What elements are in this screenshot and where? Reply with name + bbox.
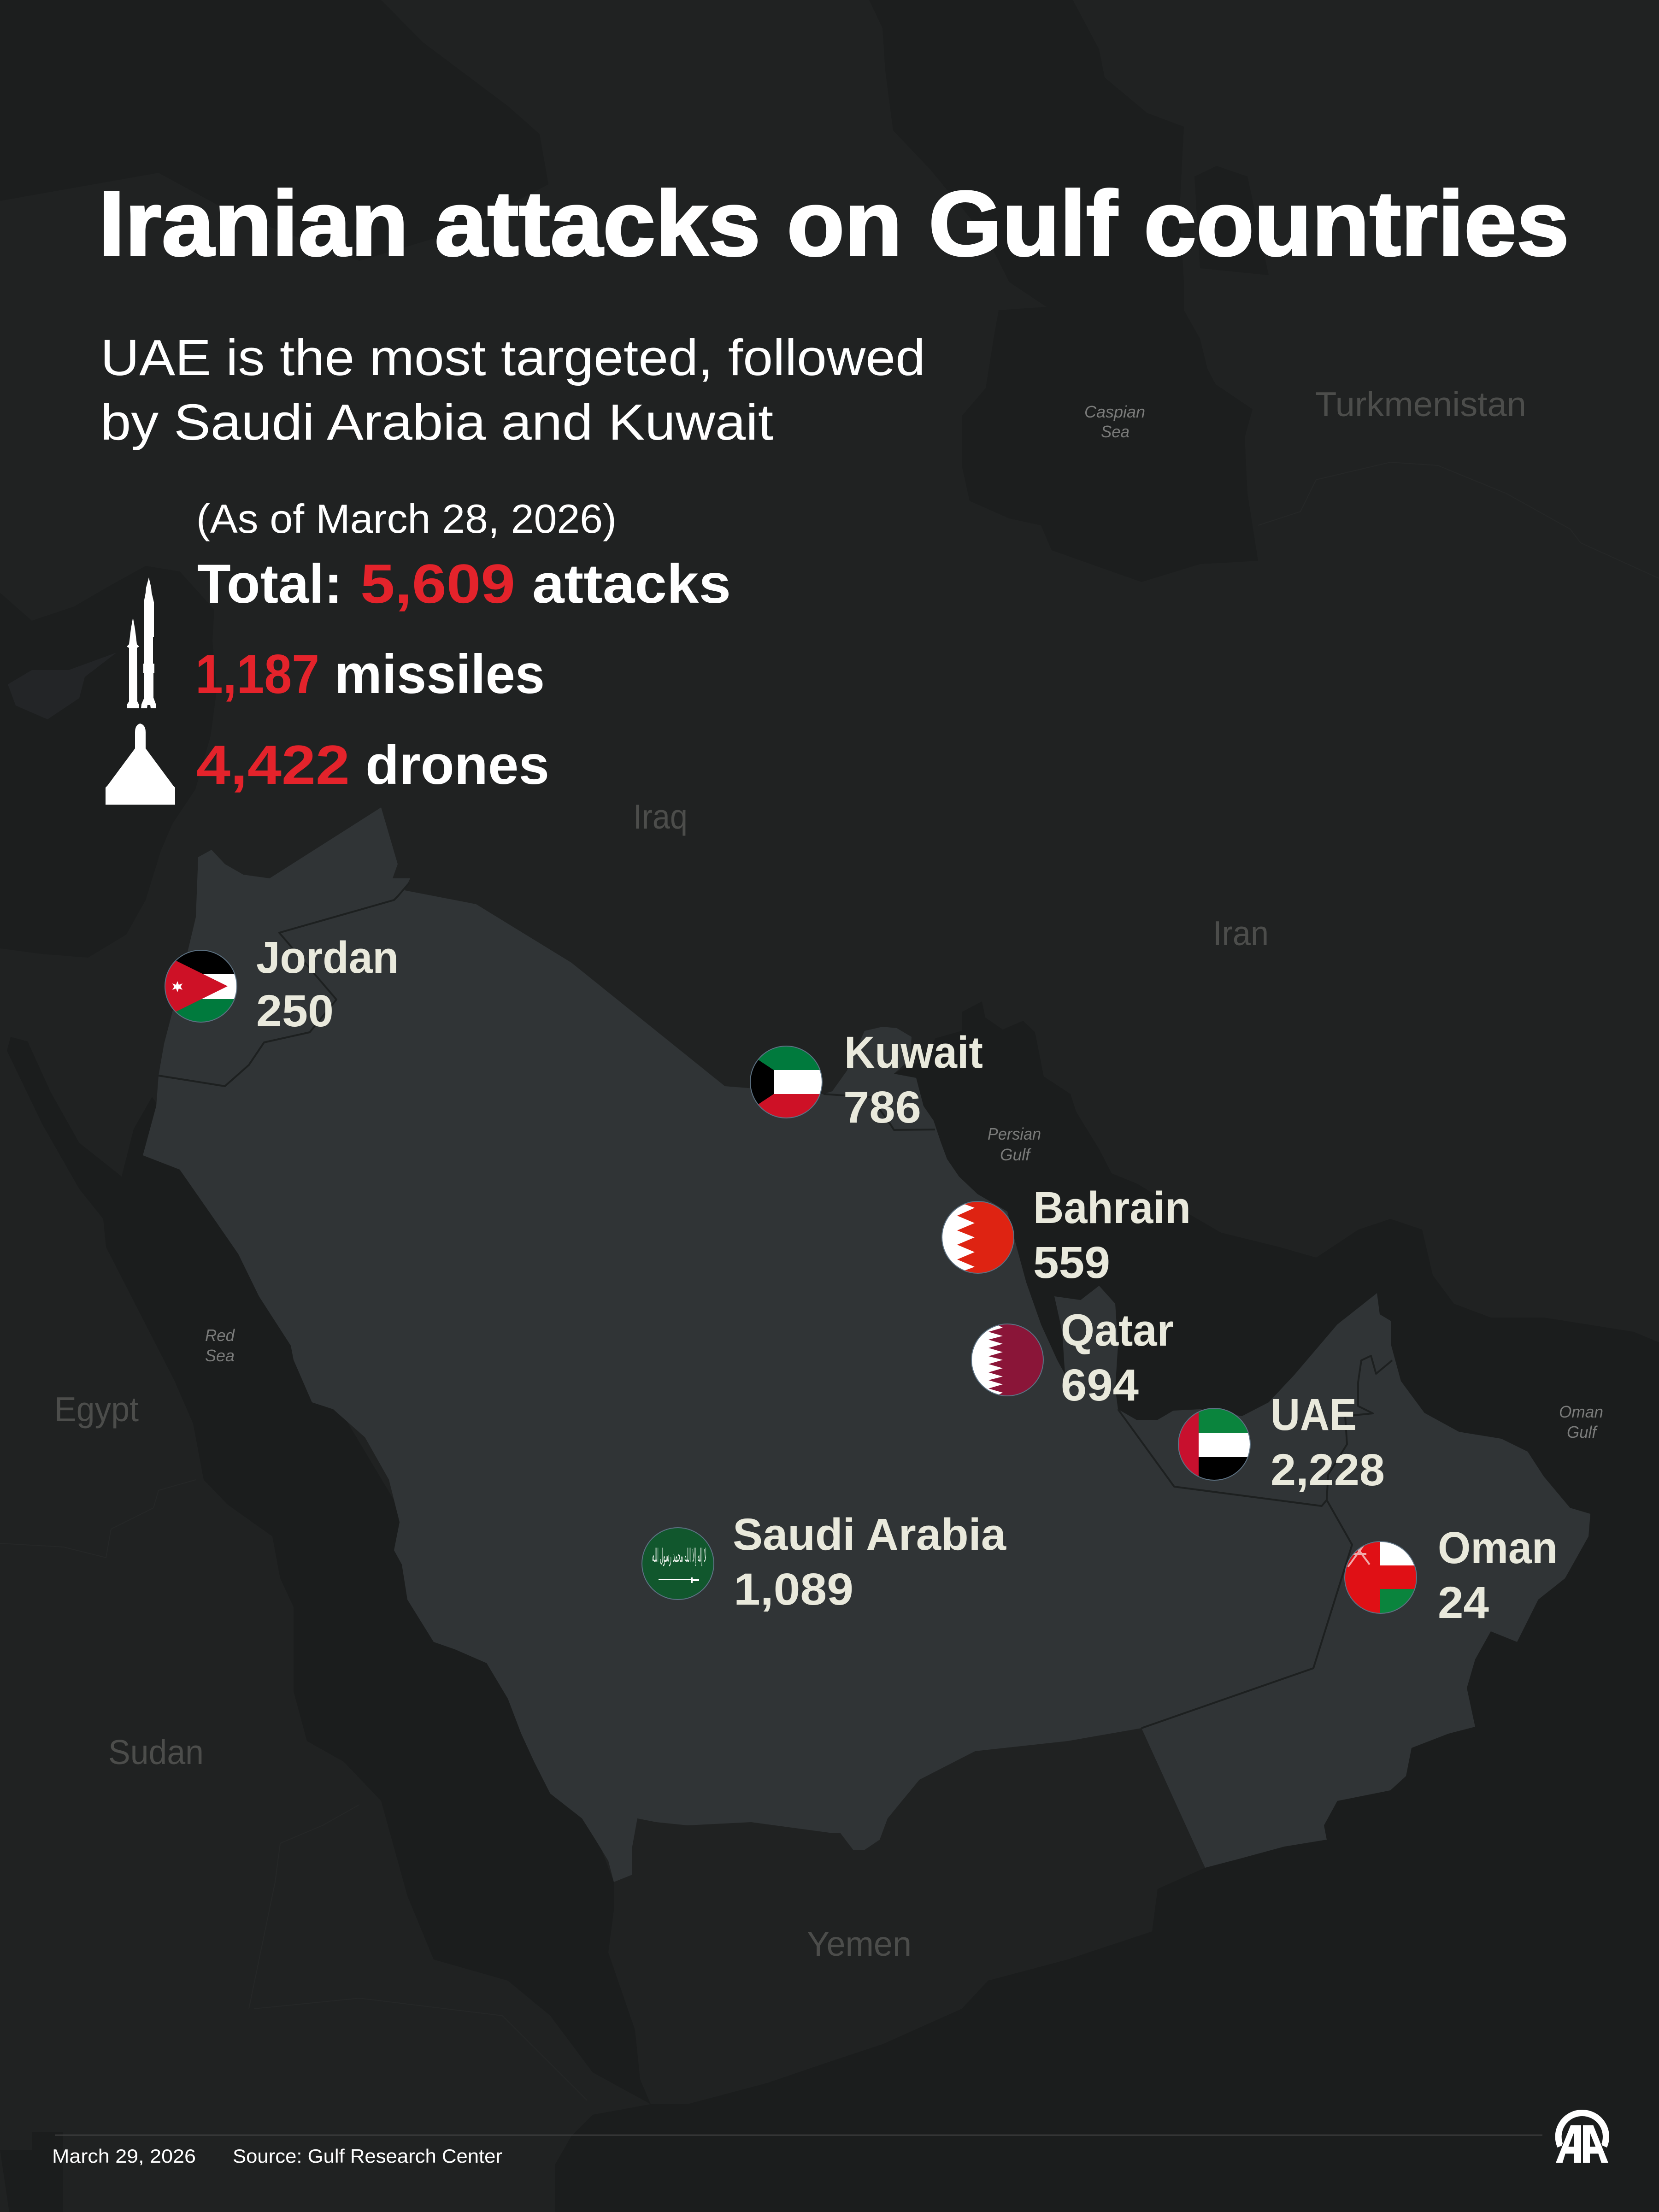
label: Turkmenistan: Turkmenistan: [1315, 385, 1526, 424]
drones count: drones: [365, 734, 549, 796]
label: Oman Gulf: [1559, 1402, 1603, 1441]
icon: drone: [106, 724, 175, 805]
total attacks: 5,609: [360, 553, 515, 615]
label: Oman 24: Oman: [1438, 1523, 1558, 1573]
marker: Saudi Arabia: [642, 1509, 1006, 1614]
flag: UAE: [1178, 1408, 1251, 1481]
Black Sea: [0, 0, 548, 261]
Caspian Sea: [869, 0, 1258, 582]
footer line: [55, 2135, 1542, 2136]
label: Jordan 250: [256, 932, 399, 1036]
map labels: [54, 385, 1603, 1963]
label: Kuwait 786: 786: [843, 1082, 921, 1132]
label: Qatar 694: 694: [1061, 1360, 1139, 1410]
Cyprus: [8, 653, 117, 719]
label: Saudi Arabia 1,089: 1,089: [734, 1564, 853, 1614]
label: Bahrain 559: 559: [1033, 1237, 1110, 1288]
date note: (As of March 28, 2026): [196, 496, 617, 541]
missiles count: 1,187: [195, 643, 319, 705]
missiles count: [195, 643, 545, 705]
footer: date: March 29, 2026: [52, 2145, 196, 2167]
label: Bahrain 559: Bahrain: [1033, 1182, 1191, 1233]
title: Iranian attacks on Gulf countries: [99, 172, 1569, 275]
label: Oman 24: 24: [1438, 1577, 1489, 1628]
label: Iran: Iran: [1213, 914, 1269, 953]
label: Persian Gulf: [988, 1124, 1041, 1164]
label: Sudan: Sudan: [108, 1733, 204, 1771]
total attacks: [197, 553, 731, 615]
label: UAE 2,228: [1271, 1389, 1385, 1495]
footer: source: Source: Gulf Research Center: [233, 2145, 502, 2167]
missiles count: missiles: [335, 643, 545, 705]
label: Oman Gulf: Gulf: [1567, 1423, 1598, 1441]
label: Persian Gulf: Persian: [988, 1124, 1041, 1143]
label: UAE 2,228: 2,228: [1271, 1445, 1385, 1495]
marker: Jordan: [165, 940, 396, 1027]
subtitle: by Saudi Arabia and Kuwait: [100, 394, 773, 451]
drones count: 4,422: [196, 734, 350, 796]
label: Caspian Sea: [1084, 402, 1145, 441]
label: Kuwait 786: Kuwait: [844, 1027, 983, 1077]
flag: Saudi Arabia: [642, 1528, 714, 1600]
label: Egypt: Egypt: [54, 1390, 139, 1429]
label: Iraq: Iraq: [633, 797, 688, 836]
label: Bahrain 559: [1033, 1182, 1191, 1288]
marker: Qatar: [971, 1314, 1173, 1401]
flag: Jordan: [165, 950, 237, 1023]
marker: Oman: [1341, 1523, 1558, 1628]
marker: Bahrain: [941, 1191, 1188, 1278]
marker: Kuwait: [750, 1035, 982, 1123]
bottom-left dark patch: [0, 2132, 63, 2212]
Persian Gulf and Arabian Sea: [555, 1001, 1659, 2212]
label: Qatar 694: [1061, 1305, 1174, 1410]
label: Oman 24: [1438, 1523, 1558, 1628]
marker: Saudi Arabia: لا إله إلا الله محمد رسول الله: [652, 1545, 706, 1566]
marker: UAE: [1178, 1399, 1383, 1492]
Red Sea: [7, 1037, 651, 2104]
faint regional borders: [0, 462, 1659, 2100]
flag: Oman: [1341, 1539, 1419, 1618]
label: Red Sea: Red: [205, 1326, 235, 1345]
icon: missiles: [127, 577, 156, 708]
label: Red Sea: [205, 1326, 235, 1365]
label: Kuwait 786: [843, 1027, 983, 1132]
label: Persian Gulf: Gulf: [1000, 1145, 1032, 1164]
highlighted countries: Arabian Peninsula: [143, 807, 1590, 1882]
Mediterranean Sea: [0, 566, 217, 958]
label: Caspian Sea: Caspian: [1084, 402, 1145, 421]
label: Oman Gulf: Oman: [1559, 1402, 1603, 1421]
label: Yemen: Yemen: [807, 1924, 912, 1963]
label: UAE 2,228: UAE: [1271, 1389, 1357, 1440]
flag: Kuwait: [750, 1046, 823, 1118]
logo: AA: [1556, 2113, 1608, 2163]
drones count: [196, 734, 549, 796]
label: Red Sea: Sea: [205, 1346, 235, 1365]
total attacks: Total:: [197, 553, 342, 615]
label: Saudi Arabia 1,089: Saudi Arabia: [733, 1509, 1006, 1559]
subtitle: [100, 329, 925, 451]
label: Jordan 250: Jordan: [256, 932, 399, 982]
country borders: [159, 883, 1392, 1728]
label: Caspian Sea: Sea: [1101, 422, 1130, 441]
subtitle: UAE is the most targeted, followed: [100, 329, 925, 386]
total attacks: attacks: [532, 553, 731, 615]
label: Jordan 250: 250: [256, 986, 334, 1036]
flag: Bahrain: [941, 1201, 1014, 1274]
label: Qatar 694: Qatar: [1061, 1305, 1174, 1355]
label: Saudi Arabia 1,089: [733, 1509, 1006, 1614]
Kara-Bogaz Gulf: [1194, 166, 1269, 275]
flag: Qatar: [971, 1324, 1044, 1396]
